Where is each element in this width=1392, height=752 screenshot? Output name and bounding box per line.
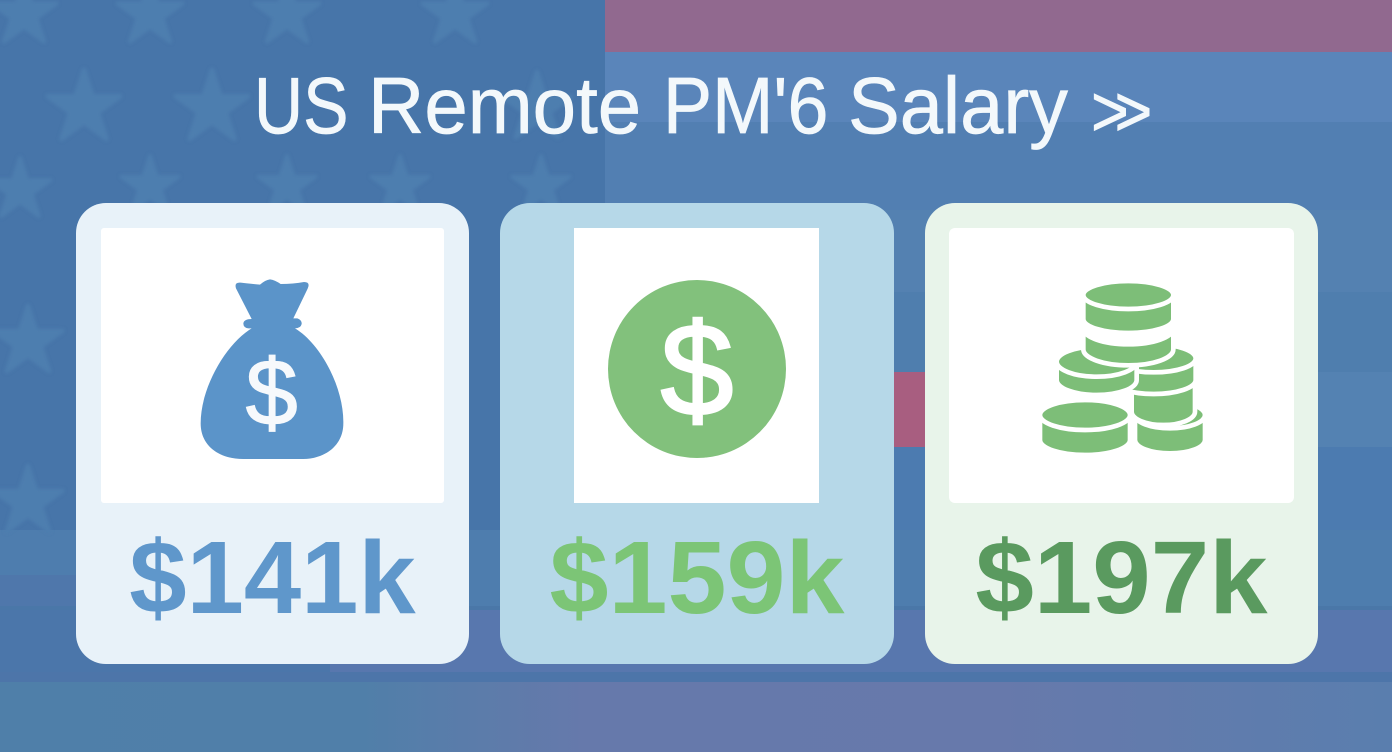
icon: dollar coin [608,280,786,458]
icon panel: coin stacks [949,228,1294,503]
value: $141k: $141k [129,520,416,635]
value: $159k: $159k [549,520,844,635]
title: >> [1091,72,1138,152]
title [254,61,1150,152]
card: $159k [500,203,894,664]
icon: money bag: $ [246,339,298,444]
card: $197k [925,203,1318,664]
title: US [254,61,348,150]
title: Salary [848,61,1068,150]
icon: dollar coin: $ [661,296,733,443]
value: $197k: $197k [975,520,1268,635]
title: Remote [368,61,641,150]
title: PM'6 [663,61,828,150]
icon: money bag [200,279,344,459]
icon panel: dollar coin [574,228,819,503]
card: $141k [76,203,469,664]
icon: coin stacks [1042,283,1203,453]
icon panel: money bag [101,228,444,503]
